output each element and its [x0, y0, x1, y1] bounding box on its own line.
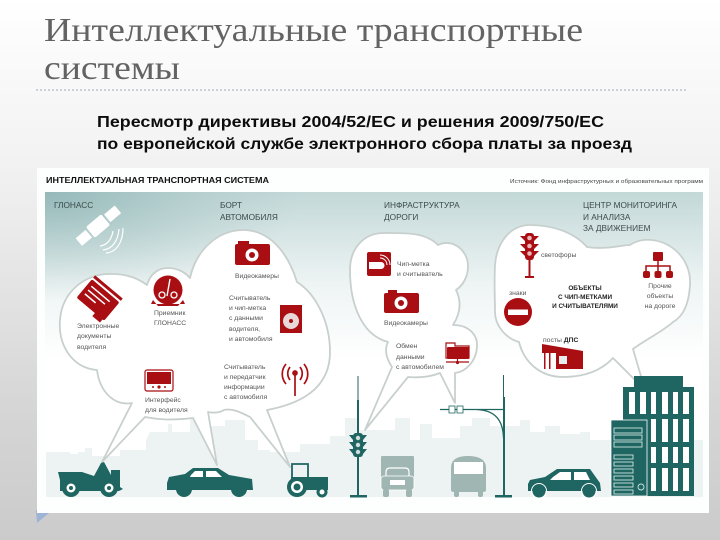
label: электронные документы: документы — [77, 333, 111, 340]
server tower — [611, 420, 647, 496]
subtitle: Пересмотр директивы 2004/52/ЕС и решения 2009/750/ЕС — [97, 114, 604, 131]
label: обмен данными: Обмен — [396, 342, 417, 350]
vehicle: hatchback — [528, 469, 601, 498]
label: объекты с чип-метками: ОБЪЕКТЫ — [568, 285, 602, 292]
label: прочие объекты: объекты — [647, 292, 673, 300]
label: видеокамеры 2: Видеокамеры — [384, 320, 428, 327]
label: приемник ГЛОНАСС: Приемник — [154, 310, 185, 317]
label: чип-метка и считыватель: и считыватель — [397, 271, 443, 278]
label: считыватель и передатчик: и передатчик — [224, 374, 266, 381]
source note: Источник: Фонд инфраструктурных и образовательных программ — [510, 179, 703, 185]
icon: chip and reader — [367, 252, 391, 276]
cloud: monitoring centre — [495, 225, 690, 390]
icon: video camera — [235, 241, 270, 265]
label: посты ДПС: посты ДПС — [543, 337, 578, 344]
heading: инфраструктура дороги: ДОРОГИ — [384, 212, 418, 222]
heading: борт автомобиля: АВТОМОБИЛЯ — [220, 212, 278, 222]
vehicle: sedan — [167, 468, 253, 497]
label: видеокамеры: Видеокамеры — [235, 273, 279, 280]
label: объекты с чип-метками: С ЧИП-МЕТКАМИ — [558, 294, 612, 301]
title: системы — [44, 50, 180, 87]
label: обмен данными: данными — [396, 354, 425, 361]
label: приемник ГЛОНАСС: ГЛОНАСС — [154, 320, 186, 327]
corner triangle — [36, 510, 49, 523]
infographic panel — [37, 168, 709, 513]
icon: driver documents — [74, 275, 123, 324]
label: прочие объекты: Прочие — [648, 283, 672, 290]
label: считыватель и чип-метка: и автомобиля — [229, 335, 273, 343]
title — [44, 12, 583, 87]
label: объекты с чип-метками: И СЧИТЫВАТЕЛЯМИ — [552, 303, 618, 310]
label: знаки: знаки — [509, 290, 527, 297]
gantry with road sensors — [440, 375, 512, 498]
icon: satellite — [74, 204, 123, 253]
label: считыватель и передатчик: Считыватель — [224, 364, 266, 371]
sky gradient — [45, 192, 703, 497]
label: прочие объекты: на дороге — [645, 303, 676, 310]
label: интерфейс для водителя: Интерфейс — [145, 396, 181, 404]
heading: центр мониторинга: ЗА ДВИЖЕНИЕМ — [583, 223, 651, 233]
vehicle: truck — [381, 456, 414, 497]
icon: police post — [542, 344, 583, 369]
heading: центр мониторинга: И АНАЛИЗА — [583, 212, 631, 222]
subtitle: по европейской службе электронного сбора платы за проезд — [97, 136, 632, 153]
heading: инфраструктура дороги: ИНФРАСТРУКТУРА — [384, 200, 460, 210]
traffic light pole — [349, 376, 367, 498]
heading: центр мониторинга: ЦЕНТР МОНИТОРИНГА — [583, 200, 677, 210]
label: считыватель и чип-метка: с данными — [229, 315, 263, 322]
label: считыватель и чип-метка: Считыватель — [229, 295, 271, 302]
label: считыватель и передатчик: с автомобиля — [224, 393, 267, 401]
icon: no entry sign — [504, 298, 532, 326]
label: считыватель и чип-метка: водителя, — [229, 326, 260, 333]
city skyline — [46, 418, 703, 497]
subtitle — [97, 114, 632, 153]
vehicle: jeep — [58, 462, 123, 497]
icon: disc reader — [280, 305, 302, 333]
icon: GLONASS receiver — [151, 276, 185, 306]
cloud: on-board vehicle — [60, 230, 330, 467]
label: считыватель и чип-метка: и чип-метка — [229, 305, 266, 312]
heading: борт автомобиля: БОРТ — [220, 200, 242, 210]
label: светофоры: светофоры — [541, 252, 576, 259]
label: чип-метка и считыватель: Чип-метка — [397, 261, 430, 268]
monitoring centre building — [623, 376, 694, 496]
title: Интеллектуальные транспортные — [44, 12, 583, 49]
icon: data folder — [446, 343, 469, 364]
heading: ГЛОНАСС: ГЛОНАСС — [54, 200, 93, 210]
label: интерфейс для водителя: для водителя — [145, 407, 188, 414]
vehicle: bus — [451, 456, 486, 497]
label: электронные документы: водителя — [77, 344, 106, 351]
icon: hierarchy — [643, 252, 673, 278]
icon: antenna — [282, 364, 308, 396]
panel heading: ИНТЕЛЛЕКТУАЛЬНАЯ ТРАНСПОРТНАЯ СИСТЕМА — [46, 176, 269, 185]
cloud: road infrastructure — [350, 233, 477, 430]
icon: traffic light — [520, 233, 539, 278]
label: электронные документы: Электронные — [77, 323, 120, 330]
icon: driver interface — [145, 370, 173, 391]
label: считыватель и передатчик: информации — [224, 384, 265, 391]
icon: video camera 2 — [384, 290, 419, 313]
label: обмен данными: с автомобилем — [396, 363, 444, 371]
vehicle: tractor — [287, 464, 328, 498]
